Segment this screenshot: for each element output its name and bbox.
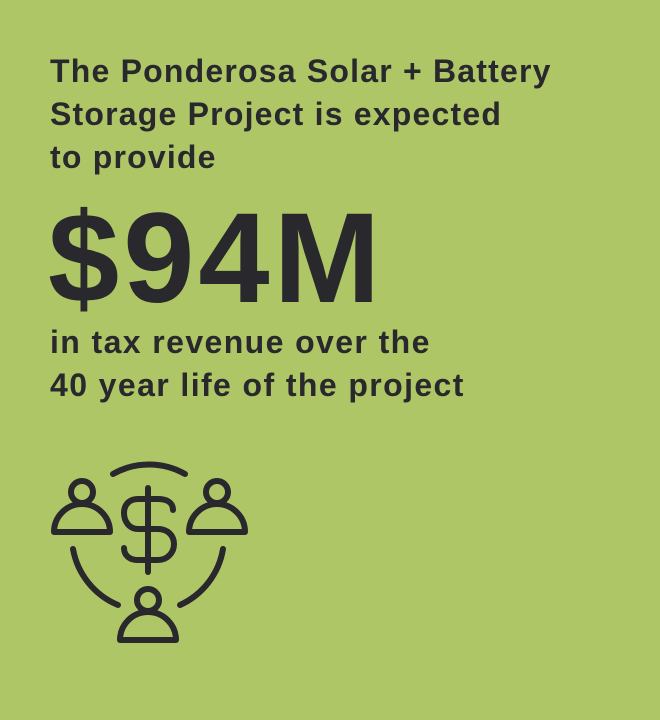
right person xyxy=(206,481,228,503)
heading text xyxy=(50,53,552,175)
subtext: 40 year life of the project xyxy=(50,367,465,403)
bottom person xyxy=(137,589,159,611)
left person xyxy=(71,481,93,503)
arcs xyxy=(113,465,185,474)
heading text: to provide xyxy=(50,139,217,175)
dollar xyxy=(145,488,151,572)
big number: $94M xyxy=(48,187,384,330)
subtext: in tax revenue over the xyxy=(50,324,431,360)
heading text: The Ponderosa Solar + Battery xyxy=(50,53,552,89)
subtext xyxy=(50,324,465,403)
heading text: Storage Project is expected xyxy=(50,96,502,132)
